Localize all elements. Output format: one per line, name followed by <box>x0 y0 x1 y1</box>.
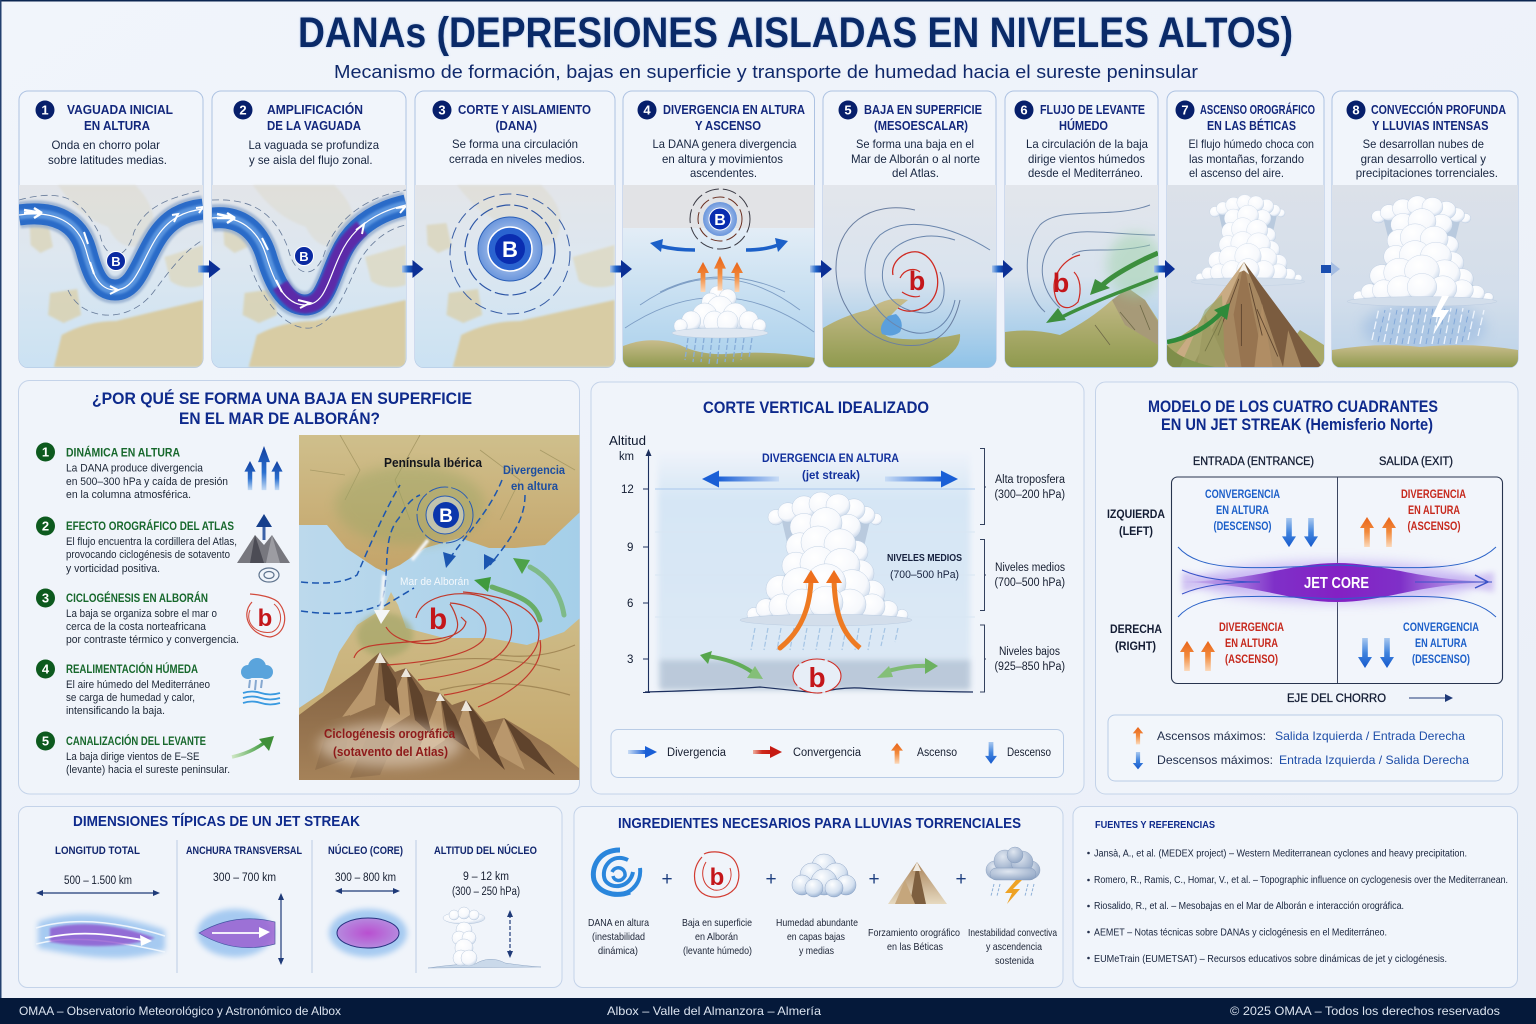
map labels <box>324 456 565 759</box>
upper divergence label and arrows <box>702 453 958 488</box>
plus 3: + <box>868 869 880 890</box>
ascent arrows <box>780 580 860 648</box>
column: transverse width: 300 – 700 km <box>213 872 276 884</box>
item 4: 4 <box>42 662 50 676</box>
item 3: por contraste térmico y convergencia. <box>66 634 239 646</box>
item 3 <box>36 588 239 646</box>
panel heading: ¿POR QUÉ SE FORMA UNA BAJA EN SUPERFICIE <box>92 389 472 408</box>
upper low B <box>417 487 473 543</box>
ingredient: orographic forcing: Forzamiento orográfico <box>868 927 960 939</box>
step 4 heading: DIVERGENCIA EN ALTURA <box>663 102 806 117</box>
quadrant: right entrance: DIVERGENCIA <box>1219 622 1284 634</box>
step 6 text <box>1026 137 1148 180</box>
step 6 text: La circulación de la baja <box>1026 137 1148 151</box>
level brackets <box>980 448 986 692</box>
quadrant: left exit: DIVERGENCIA <box>1401 489 1466 501</box>
jet axis label and arrow <box>1287 691 1453 705</box>
ingredient: humidity: y medias <box>799 945 834 957</box>
step 8 heading <box>1346 100 1506 133</box>
level labels: (925–850 hPa) <box>994 661 1065 673</box>
column: core altitude: ALTITUD DEL NÚCLEO <box>434 844 537 857</box>
rain <box>751 628 898 650</box>
map labels: Ciclogénesis orográfica <box>324 726 456 741</box>
step 3 text: Se forma una circulación <box>452 137 578 151</box>
rain <box>685 338 752 364</box>
step 5 illustration: mesoscale surface low <box>823 185 996 368</box>
step 1 text: sobre latitudes medias. <box>48 153 167 167</box>
quadrant: right entrance <box>1180 622 1284 671</box>
step 4 text <box>652 137 797 180</box>
map: Alboran sea <box>299 435 580 780</box>
altitude axis: 6 <box>627 598 633 610</box>
step 7 text: las montañas, forzando <box>1189 152 1304 166</box>
step 8 heading: 8 <box>1352 102 1360 118</box>
row labels: IZQUIERDA <box>1107 507 1165 521</box>
step 3 heading: 3 <box>438 102 446 118</box>
step 7 text: el ascenso del aire. <box>1189 166 1284 180</box>
storm cloud <box>740 492 912 626</box>
quadrant box <box>1172 477 1502 684</box>
step 4 text: ascendentes. <box>690 166 757 180</box>
dimensions heading: DIMENSIONES TÍPICAS DE UN JET STREAK <box>73 813 360 830</box>
ingredients heading: INGREDIENTES NECESARIOS PARA LLUVIAS TORRENCIALES <box>618 815 1021 832</box>
upper divergence label and arrows: DIVERGENCIA EN ALTURA <box>762 453 899 465</box>
panel heading <box>92 389 472 428</box>
panel: step 3 <box>415 91 615 368</box>
column labels: SALIDA (EXIT) <box>1379 456 1453 468</box>
step 5 text <box>851 137 980 180</box>
step 4 heading: Y ASCENSO <box>695 118 761 133</box>
arrow: step 6 to 7 <box>1154 260 1175 278</box>
plus 1: + <box>661 869 673 890</box>
reference list: AEMET – Notas técnicas sobre DANAs y ciclogénesis en el Mediterráneo. <box>1094 928 1387 938</box>
level labels: Niveles medios <box>995 562 1065 574</box>
ingredient: surface low: (levante húmedo) <box>683 945 752 957</box>
footer: © 2025 OMAA – Todos los derechos reservados <box>1230 1004 1500 1018</box>
step 2 illustration: amplified trough <box>212 185 406 368</box>
surface low b and red flow <box>354 592 541 707</box>
item 4: REALIMENTACIÓN HÚMEDA <box>66 663 198 676</box>
step 3 heading: CORTE Y AISLAMIENTO <box>458 102 591 117</box>
step 3 text: cerrada en niveles medios. <box>449 152 585 166</box>
column: core: NÚCLEO (CORE) <box>328 844 403 857</box>
panel: step 7 <box>1166 91 1324 368</box>
legend: Descenso <box>1007 747 1051 759</box>
arrow: step 7 to 8 <box>1321 262 1340 276</box>
arrow: step 4 to 5 <box>810 260 832 278</box>
panel: step 5 <box>823 91 996 368</box>
quadrant: left exit <box>1360 489 1466 547</box>
step 5 heading <box>838 100 982 133</box>
step 6 heading <box>1014 100 1145 133</box>
ground <box>645 687 973 693</box>
step 2 heading: AMPLIFICACIÓN <box>267 102 363 117</box>
level labels: Niveles bajos <box>999 646 1060 658</box>
step 7 heading: EN LAS BÉTICAS <box>1207 118 1296 133</box>
column: core altitude: 9 – 12 km <box>463 871 509 883</box>
step 1 text: Onda en chorro polar <box>52 138 160 152</box>
quadrant: right entrance: EN ALTURA <box>1225 638 1278 650</box>
quadrant: left entrance: EN ALTURA <box>1216 505 1269 517</box>
step 1 heading: EN ALTURA <box>84 118 151 133</box>
step 6 heading: FLUJO DE LEVANTE <box>1040 102 1145 117</box>
jet core: JET CORE <box>1304 575 1369 592</box>
plus 2: + <box>765 869 777 890</box>
quadrant: left exit: (ASCENSO) <box>1408 521 1461 533</box>
title: DANAs (DEPRESIONES AISLADAS EN NIVELES ALTOS) <box>298 9 1293 57</box>
step 4 illustration: upper divergence and ascent: B <box>714 212 726 229</box>
step 1 heading <box>36 100 173 133</box>
plus 4: + <box>955 869 967 890</box>
divergence arrows <box>650 238 788 252</box>
step 2 illustration: amplified trough: B <box>299 249 309 264</box>
step 2 text: La vaguada se profundiza <box>248 138 379 152</box>
column: core altitude: (300 – 250 hPa) <box>452 886 520 898</box>
step 4 heading <box>638 100 806 133</box>
column: transverse width: ANCHURA TRANSVERSAL <box>186 845 302 857</box>
panel: vertical section <box>591 382 1084 794</box>
item 4: se carga de humedad y calor, <box>66 692 195 704</box>
map labels: Península Ibérica <box>384 456 483 470</box>
reference list <box>1087 848 1508 965</box>
altitude axis: 12 <box>621 484 634 496</box>
item 2: EFECTO OROGRÁFICO DEL ATLAS <box>66 520 234 533</box>
column labels <box>1193 456 1453 468</box>
item 5: La baja dirige vientos de E–SE <box>66 751 200 763</box>
step 4 text: La DANA genera divergencia <box>652 137 797 151</box>
quadrant: right exit <box>1358 622 1479 668</box>
upper divergence label and arrows: (jet streak) <box>802 470 860 482</box>
ingredient: convective instability: Inestabilidad convectiva <box>968 927 1057 939</box>
item 3: 3 <box>42 590 49 606</box>
ingredient: humidity: Humedad abundante <box>776 917 858 929</box>
step 6 illustration: humid easterly flow <box>1005 185 1163 368</box>
panel: step 4 <box>623 91 815 368</box>
step 7 text: El flujo húmedo choca con <box>1188 137 1314 151</box>
row labels: DERECHA <box>1110 622 1162 636</box>
panel: step 6 <box>1005 91 1163 368</box>
row labels: (LEFT) <box>1119 524 1153 538</box>
quadrant: left entrance: (DESCENSO) <box>1214 521 1272 533</box>
legend <box>611 730 1064 778</box>
step 5 heading: (MESOESCALAR) <box>874 118 968 133</box>
row labels <box>1107 507 1165 653</box>
item 5: CANALIZACIÓN DEL LEVANTE <box>66 735 206 748</box>
upper low B: B <box>439 506 453 527</box>
legend: Convergencia <box>793 747 862 759</box>
column: core: 300 – 800 km <box>335 872 396 884</box>
ingredient: orographic forcing: en las Béticas <box>887 941 943 953</box>
step 3 heading: (DANA) <box>496 118 537 133</box>
sources heading: FUENTES Y REFERENCIAS <box>1095 820 1215 831</box>
item 3: La baja se organiza sobre el mar o <box>66 608 217 620</box>
map labels: en altura <box>511 479 558 493</box>
maxima summary box: Ascensos máximos: <box>1157 729 1266 743</box>
maxima summary box: Entrada Izquierda / Salida Derecha <box>1279 753 1469 767</box>
step 2 heading: DE LA VAGUADA <box>267 118 362 133</box>
icon: humid cloud over sea <box>241 658 280 704</box>
panel heading: EN EL MAR DE ALBORÁN? <box>179 409 380 428</box>
level labels: Alta troposfera <box>995 474 1066 486</box>
level labels: (300–200 hPa) <box>994 489 1065 501</box>
arrow: step 3 to 4 <box>610 260 632 278</box>
ingredient: surface low: en Alborán <box>695 931 738 943</box>
chart: idealized cross-section <box>609 434 975 693</box>
ingredient: convective instability <box>968 847 1057 967</box>
reference list: Jansà, A., et al. (MEDEX project) – Western Mediterranean cyclones and heavy precipitation. <box>1094 848 1467 860</box>
step 7 illustration: orographic lift <box>1166 185 1324 368</box>
dashed blue upper flows <box>301 480 525 613</box>
step 4 text: en altura y movimientos <box>662 152 783 166</box>
step 8 heading: Y LLUVIAS INTENSAS <box>1372 118 1489 133</box>
ingredient: convective instability: sostenida <box>995 955 1034 967</box>
item 1: DINÁMICA EN ALTURA <box>66 446 180 460</box>
quadrant heading <box>1148 398 1438 434</box>
item 1: La DANA produce divergencia <box>66 462 204 474</box>
maxima summary box <box>1108 715 1502 781</box>
arrow: step 5 to 6 <box>992 260 1013 278</box>
jet axis label and arrow: EJE DEL CHORRO <box>1287 691 1386 705</box>
map labels: Divergencia <box>503 463 565 477</box>
ingredient: convective instability: y ascendencia <box>986 941 1042 953</box>
altitude axis <box>609 434 652 693</box>
ingredient: humidity <box>776 854 858 957</box>
step 7 heading: ASCENSO OROGRÁFICO <box>1200 102 1315 117</box>
panel: why a surface low forms <box>18 380 580 794</box>
mountains <box>299 652 579 780</box>
step 4 heading: 4 <box>643 102 651 118</box>
quadrant: right exit: (DESCENSO) <box>1412 654 1470 666</box>
item 3: cerca de la costa norteafricana <box>66 621 207 633</box>
low-level green arrows <box>707 656 928 672</box>
item 1: en la columna atmosférica. <box>66 489 191 501</box>
step 8 text <box>1356 137 1498 180</box>
panel: four quadrant model <box>1096 382 1518 794</box>
quadrant: left exit: EN ALTURA <box>1408 505 1460 517</box>
ingredient: surface low: b <box>710 864 724 891</box>
step 7 heading: 7 <box>1181 102 1189 118</box>
step 3 illustration: cut-off low <box>415 185 615 368</box>
quadrant: left entrance: CONVERGENCIA <box>1205 489 1280 501</box>
panel: sources and references <box>1073 806 1518 988</box>
panel: jet streak dimensions <box>18 806 562 988</box>
step 5 illustration: mesoscale surface low: b <box>909 266 925 296</box>
item 5 <box>36 732 230 776</box>
ingredient: upper low: DANA en altura <box>588 917 649 929</box>
column: transverse width <box>186 845 302 965</box>
row labels: (RIGHT) <box>1115 639 1156 653</box>
step 6 heading: HÚMEDO <box>1059 118 1108 133</box>
surface low b and red flow: b <box>429 603 447 636</box>
step 2 text: y se aisla del flujo zonal. <box>249 153 372 167</box>
section heading: CORTE VERTICAL IDEALIZADO <box>703 399 929 417</box>
ascent arrows <box>697 256 743 292</box>
icon: rising arrows <box>244 446 283 490</box>
item 1 <box>36 442 228 501</box>
column: core <box>328 844 407 957</box>
altitude axis: Altitud <box>609 434 646 448</box>
step 8 text: precipitaciones torrenciales. <box>1356 166 1498 180</box>
jet core <box>1178 547 1496 617</box>
column: total length <box>36 845 165 958</box>
level labels: (700–500 hPa) <box>994 577 1065 589</box>
footer <box>0 998 1536 1024</box>
ingredient: surface low: Baja en superficie <box>682 917 752 929</box>
step 1 illustration: jet trough map: B <box>111 254 121 269</box>
quadrant: right exit: CONVERGENCIA <box>1403 622 1479 634</box>
step 1 heading: VAGUADA INICIAL <box>67 102 173 117</box>
quadrant heading: EN UN JET STREAK (Hemisferio Norte) <box>1161 416 1433 434</box>
ingredient: orographic forcing <box>868 862 960 953</box>
icon: mountain with rising air and vortex <box>237 514 290 582</box>
item 3: CICLOGÉNESIS EN ALBORÁN <box>66 592 208 605</box>
step 1 illustration: jet trough map <box>19 185 203 368</box>
panel: step 2 <box>212 91 406 368</box>
arrow: step 2 to 3 <box>402 260 424 278</box>
altitude axis: 9 <box>627 542 633 554</box>
step 8 illustration: deep convection <box>1332 185 1518 368</box>
column: total length: 500 – 1.500 km <box>64 875 132 887</box>
item 2: provocando ciclogénesis de sotavento <box>66 549 230 561</box>
panel: ingredients <box>574 806 1063 988</box>
mid level label: NIVELES MEDIOS <box>887 552 962 564</box>
ingredient: humidity: en capas bajas <box>787 931 845 943</box>
subtitle: Mecanismo de formación, bajas en superficie y transporte de humedad hacia el sureste peninsular <box>334 61 1198 82</box>
map labels: (sotavento del Atlas) <box>333 744 448 759</box>
icon: surface low <box>247 594 285 637</box>
step 4 illustration: upper divergence and ascent <box>623 185 815 368</box>
step 6 text: desde el Mediterráneo. <box>1028 166 1143 180</box>
column labels: ENTRADA (ENTRANCE) <box>1193 456 1314 468</box>
step 8 text: gran desarrollo vertical y <box>1361 152 1486 166</box>
column: core altitude <box>428 844 541 968</box>
step 2 text <box>248 138 379 167</box>
step 3 heading <box>432 100 591 133</box>
step 8 heading: CONVECCIÓN PROFUNDA <box>1371 102 1506 117</box>
quadrant: right entrance: (ASCENSO) <box>1225 654 1278 666</box>
item 2 <box>36 516 237 575</box>
step 7 heading <box>1176 100 1315 133</box>
step 8 text: Se desarrollan nubes de <box>1363 137 1484 151</box>
step 5 heading: 5 <box>844 102 852 118</box>
arrow: step 1 to 2 <box>198 260 220 278</box>
step 3 text <box>449 137 585 166</box>
panel: step 1 <box>19 91 203 368</box>
step 6 text: dirige vientos húmedos <box>1028 152 1145 166</box>
step 6 heading: 6 <box>1020 102 1028 118</box>
step 1 text <box>48 138 167 167</box>
item 4 <box>36 660 210 717</box>
quadrant: right exit: EN ALTURA <box>1415 638 1467 650</box>
step 3 illustration: cut-off low: B <box>502 237 518 262</box>
item 5: (levante) hacia el sureste peninsular. <box>66 764 230 776</box>
altitude axis: 3 <box>627 654 633 666</box>
item 2: 2 <box>42 518 49 534</box>
step 5 heading: BAJA EN SUPERFICIE <box>864 102 982 117</box>
green levante arrows <box>492 567 564 620</box>
item 5: 5 <box>42 734 49 748</box>
item 1: 1 <box>42 444 49 460</box>
legend: Ascenso <box>917 747 957 759</box>
step 5 text: Se forma una baja en el <box>856 137 974 151</box>
icon: green levante arrow <box>232 736 274 757</box>
ingredient: upper low: (inestabilidad <box>592 931 645 943</box>
surface low <box>793 659 841 693</box>
item 4: El aire húmedo del Mediterráneo <box>66 679 210 691</box>
item 2: El flujo encuentra la cordillera del Atlas, <box>66 536 237 548</box>
legend: Divergencia <box>667 747 727 759</box>
icon: surface low: b <box>258 605 272 632</box>
reference list: EUMeTrain (EUMETSAT) – Recursos educativos sobre dinámicas de jet y ciclogénesis. <box>1094 954 1447 965</box>
quadrant: left entrance <box>1205 489 1318 547</box>
mid level label <box>887 552 962 581</box>
step 1 heading: 1 <box>41 102 49 118</box>
altitude axis: km <box>619 451 634 463</box>
quadrant heading: MODELO DE LOS CUATRO CUADRANTES <box>1148 398 1438 416</box>
ingredient: upper low: dinámica) <box>598 945 638 957</box>
reference list: Riosalido, R., et al. – Mesobajas en el Mar de Alborán e interacción orográfica. <box>1094 901 1404 912</box>
ingredient: surface low <box>682 852 752 957</box>
item 1: en 500–300 hPa y caída de presión <box>66 476 228 488</box>
step 5 text: del Atlas. <box>892 166 939 180</box>
column: total length: LONGITUD TOTAL <box>55 845 140 857</box>
item 4: intensificando la baja. <box>66 705 165 717</box>
map labels: Mar de Alborán <box>400 576 469 588</box>
step 2 heading: 2 <box>239 102 247 118</box>
level labels <box>994 474 1066 673</box>
surface low: b <box>808 662 826 693</box>
step 5 text: Mar de Alborán o al norte <box>851 152 980 166</box>
item 2: y vorticidad positiva. <box>66 563 160 575</box>
step 7 text <box>1188 137 1314 180</box>
footer: Albox – Valle del Almanzora – Almería <box>607 1004 821 1018</box>
step 2 heading <box>234 100 363 133</box>
mid level label: (700–500 hPa) <box>890 569 959 581</box>
maxima summary box: Descensos máximos: <box>1157 753 1273 767</box>
panel: step 8 <box>1332 91 1518 368</box>
ingredient: upper low <box>588 850 649 957</box>
maxima summary box: Salida Izquierda / Entrada Derecha <box>1275 729 1465 743</box>
step 6 illustration: humid easterly flow: b <box>1053 268 1069 298</box>
footer: OMAA – Observatorio Meteorológico y Astronómico de Albox <box>19 1004 341 1018</box>
